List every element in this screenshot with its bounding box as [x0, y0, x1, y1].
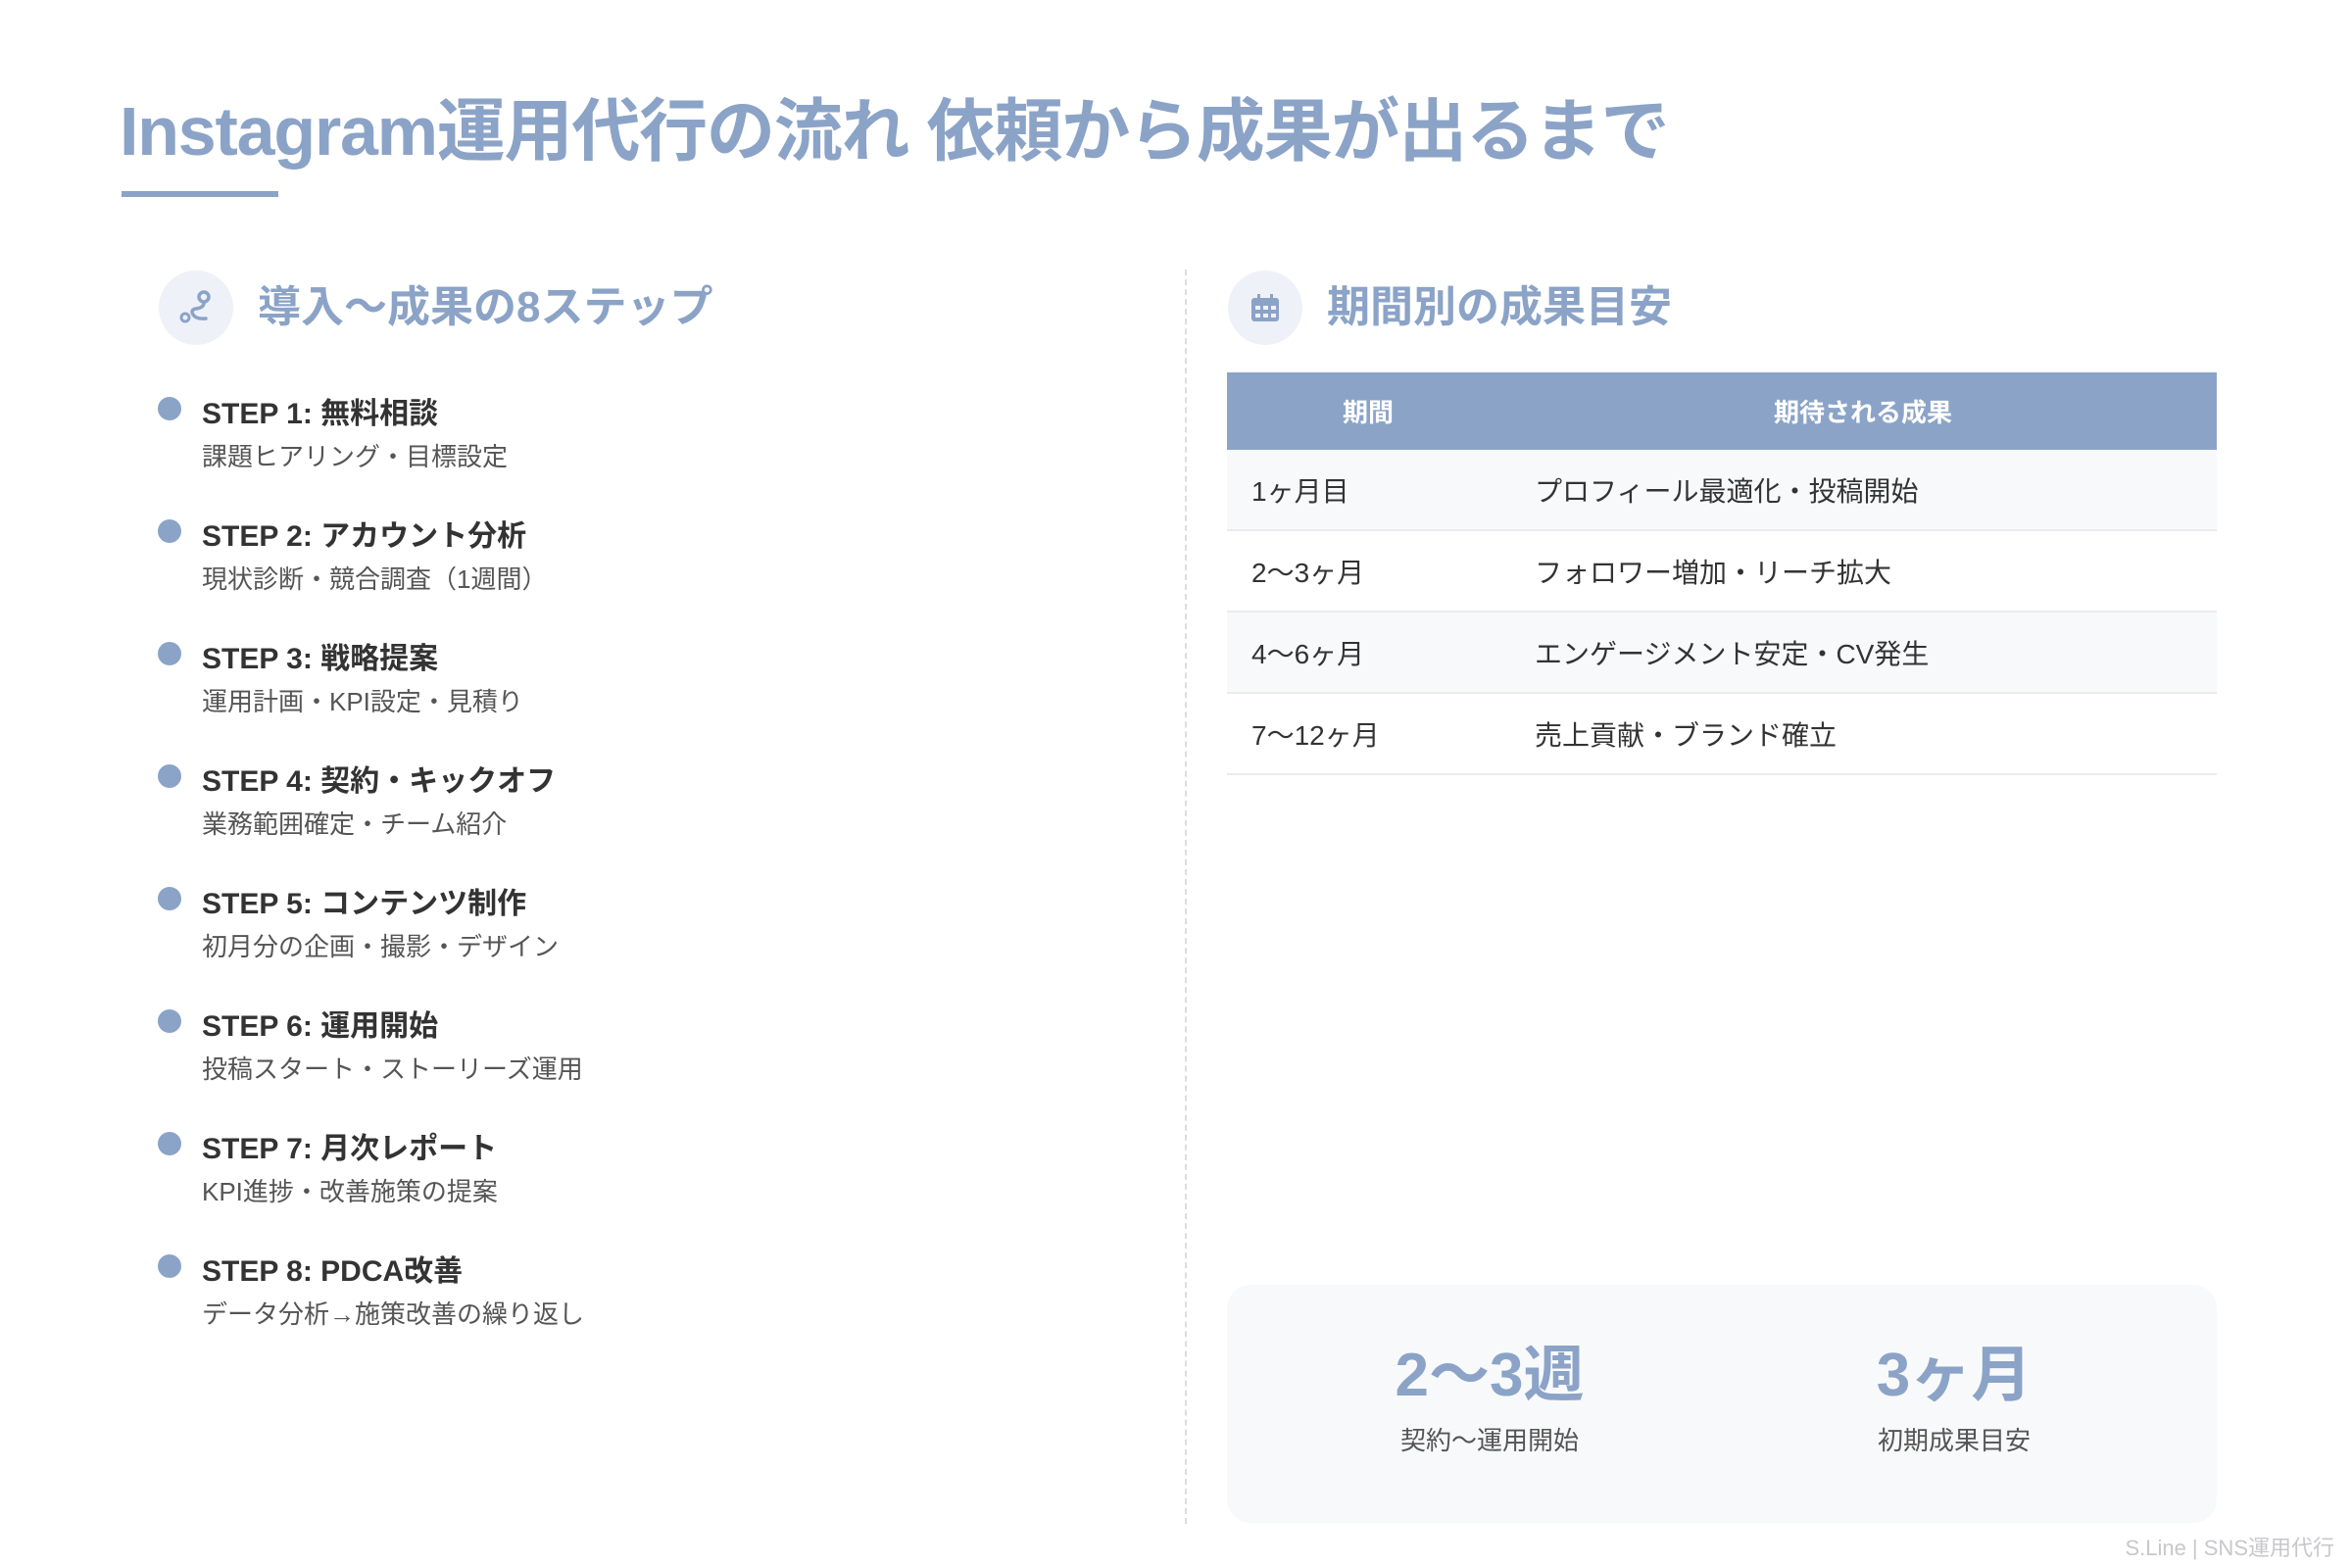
heading: 8 steps: 導入〜成果の8ステップ	[258, 283, 712, 331]
step 2: STEP 2: アカウント分析	[202, 520, 526, 553]
step 4: 業務範囲確定・チーム紹介	[202, 809, 507, 839]
step 4: STEP 4: 契約・キックオフ	[202, 765, 556, 798]
step 5: 初月分の企画・撮影・デザイン	[202, 932, 559, 961]
step 7	[158, 1132, 498, 1206]
step 1: 課題ヒアリング・目標設定	[202, 442, 508, 471]
stat: 3 months: 初期成果目安	[1878, 1426, 2031, 1455]
step 5	[158, 887, 559, 961]
step 8: データ分析→施策改善の繰り返し	[202, 1299, 584, 1329]
stat: 3 months: 3ヶ月	[1877, 1342, 2032, 1409]
step 6: STEP 6: 運用開始	[202, 1010, 438, 1043]
table: 4〜6ヶ月	[1251, 639, 1364, 668]
stat: 2-3 weeks: 2〜3週	[1396, 1342, 1584, 1409]
table: 売上貢献・ブランド確立	[1535, 719, 1837, 751]
table: 期待される成果	[1774, 398, 1952, 427]
step 8	[158, 1254, 584, 1329]
icon: calendar	[1228, 270, 1302, 345]
step 3	[158, 642, 523, 716]
step 2: 現状診断・競合調査（1週間）	[202, 564, 547, 594]
heading: period results: 期間別の成果目安	[1327, 283, 1672, 331]
table: プロフィール最適化・投稿開始	[1535, 476, 1918, 506]
table: 期間	[1343, 398, 1394, 427]
stat: 2-3 weeks: 契約〜運用開始	[1400, 1426, 1579, 1455]
stat: 3 months	[1877, 1342, 2032, 1455]
table: 1ヶ月目	[1251, 476, 1349, 506]
title underline	[122, 191, 278, 197]
title: Instagram運用代行の流れ 依頼から成果が出るまで	[120, 93, 1668, 170]
step 1: STEP 1: 無料相談	[202, 398, 438, 430]
table: フォロワー増加・リーチ拡大	[1535, 557, 1891, 588]
step 7: STEP 7: 月次レポート	[202, 1133, 497, 1165]
table: エンゲージメント安定・CV発生	[1535, 639, 1929, 668]
summary box	[1227, 1285, 2217, 1523]
table: 2〜3ヶ月	[1251, 557, 1364, 588]
step list	[158, 397, 584, 1329]
step 4	[158, 764, 556, 839]
step 6: 投稿スタート・ストーリーズ運用	[202, 1054, 583, 1084]
footer credit: S.Line | SNS運用代行	[2125, 1536, 2334, 1560]
step 6	[158, 1009, 583, 1084]
table	[1227, 372, 2217, 775]
step 7: KPI進捗・改善施策の提案	[202, 1177, 498, 1206]
table: 7〜12ヶ月	[1251, 719, 1380, 751]
icon: steps route	[159, 270, 233, 345]
step 1	[158, 397, 508, 471]
divider	[1185, 270, 1187, 1524]
step 8: STEP 8: PDCA改善	[202, 1255, 463, 1288]
step 3: 運用計画・KPI設定・見積り	[202, 687, 523, 716]
step 5: STEP 5: コンテンツ制作	[202, 888, 526, 920]
step 2	[158, 519, 547, 594]
stat: 2-3 weeks	[1396, 1342, 1584, 1455]
step 3: STEP 3: 戦略提案	[202, 643, 438, 675]
